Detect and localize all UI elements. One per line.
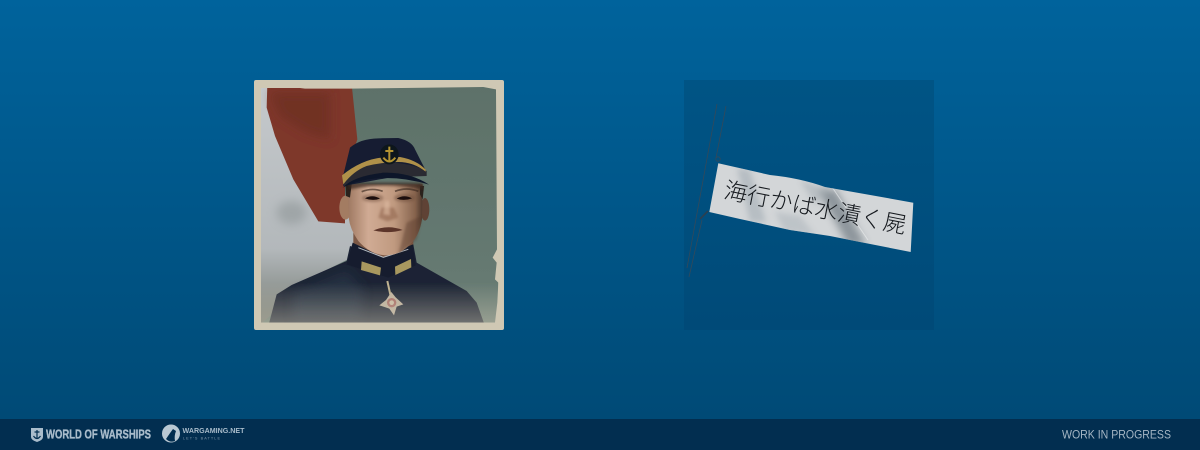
right ear: [422, 198, 430, 220]
footer bar: [0, 419, 1200, 450]
red flag fold: [270, 93, 330, 139]
cap gold band: [342, 157, 426, 184]
cap anchor: [383, 147, 395, 162]
rope ring top: [716, 157, 720, 161]
white flag: [258, 84, 355, 326]
visor shadow: [348, 183, 423, 189]
right brow: [395, 189, 418, 191]
white collar line: [358, 248, 408, 257]
icon: shield: [31, 428, 43, 442]
flag shadow: [277, 201, 307, 224]
wordmark: WARGAMING.NET: [182, 426, 245, 435]
Wargaming.net logo: [162, 424, 245, 442]
banner folds: [737, 168, 868, 245]
nose light: [383, 201, 390, 215]
tagline: LET'S BATTLE: [183, 436, 220, 440]
cap visor: [343, 173, 429, 188]
right eye socket: [394, 194, 415, 202]
bottom fade: [261, 286, 498, 322]
medal center: [387, 298, 396, 307]
cap dark band: [343, 163, 427, 186]
left eye socket: [362, 194, 383, 202]
medal ribbon: [387, 281, 391, 296]
work in progress label: WORK IN PROGRESS: [1062, 428, 1171, 442]
nose shadow: [378, 208, 398, 221]
portrait paper frame: [254, 80, 504, 330]
banner cloth: [709, 163, 913, 252]
flag ropes: [687, 104, 726, 277]
panel: banner flag: [684, 80, 934, 330]
wall backdrop: [257, 83, 503, 329]
cap crown: [343, 138, 426, 186]
mouth: [373, 227, 403, 232]
uniform body: [268, 244, 485, 326]
portrait painting: [257, 83, 503, 329]
neck: [353, 232, 414, 257]
left ear: [339, 196, 349, 220]
red flag disc: [267, 84, 357, 223]
left eye: [365, 196, 380, 200]
left brow: [362, 189, 383, 192]
collar patch right: [395, 259, 411, 275]
cap badge: [380, 144, 399, 164]
right eye: [397, 196, 412, 200]
panel: commander portrait: [254, 80, 504, 330]
uniform highlight: [295, 276, 360, 314]
wordmark: WORLD OF WARSHIPS: [46, 428, 151, 442]
medal star: [379, 292, 403, 315]
banner text: 海行かば水漬く屍: [722, 171, 910, 240]
collar patch left: [361, 261, 381, 275]
jaw shadow: [398, 218, 420, 253]
hair: [345, 184, 352, 198]
rope ring bottom: [700, 211, 708, 219]
face: [347, 184, 423, 255]
World of Warships logo: [31, 428, 151, 442]
icon: wargaming circle: [162, 424, 180, 442]
banner cloth with text: [709, 163, 913, 252]
collar: [347, 243, 416, 278]
